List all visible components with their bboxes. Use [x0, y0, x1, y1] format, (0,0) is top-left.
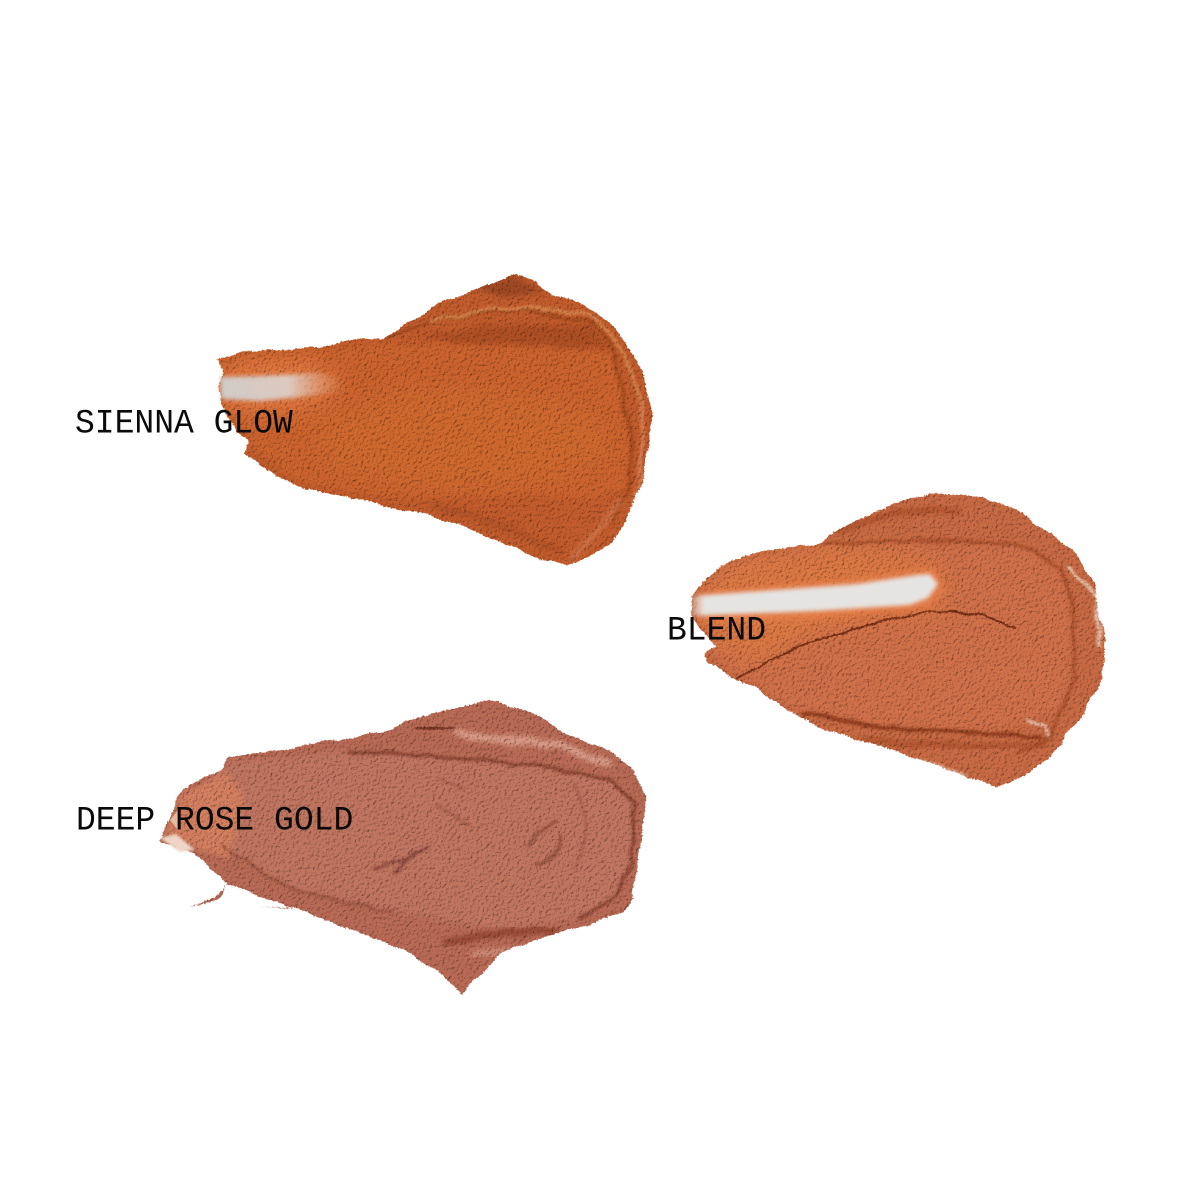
smear: white primer	[220, 373, 345, 401]
stripe: white primer	[692, 574, 938, 616]
glow: orange beside stripe	[700, 567, 945, 624]
swatches artwork	[159, 274, 1106, 995]
label: blend: BLEND	[667, 611, 766, 650]
smear: pale notch	[170, 808, 180, 830]
label: deep rose gold: DEEP ROSE GOLD	[76, 801, 353, 840]
label: sienna glow: SIENNA GLOW	[75, 404, 293, 443]
swatch: sienna glow	[205, 274, 652, 566]
swatch: blend	[692, 494, 1105, 787]
swatch: deep rose gold	[160, 700, 646, 994]
smear: pale tip	[160, 834, 195, 852]
